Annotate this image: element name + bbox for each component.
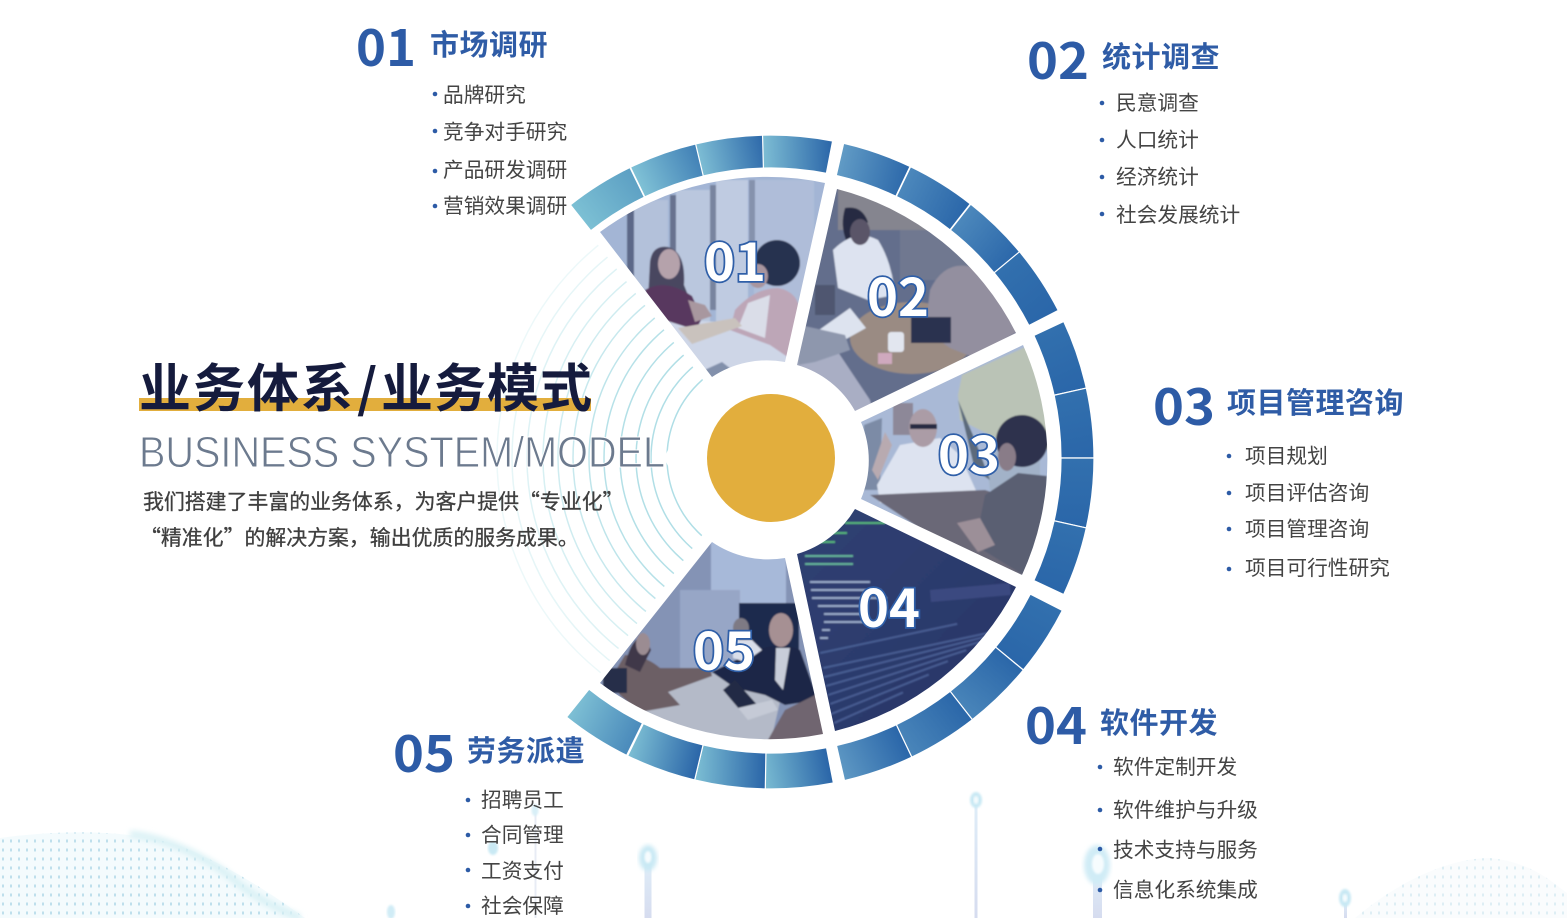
item block 01: market research: 市场调研 (430, 29, 548, 62)
item block 03: project management consulting: 项目管理咨询 (1227, 387, 1404, 420)
item block 02: statistical survey (1027, 22, 1240, 227)
item block 05: labour dispatch (393, 715, 585, 918)
background: left dotted wave (0, 832, 305, 918)
item block 03: project management consulting (1153, 368, 1404, 580)
item block 01: market research: 竞争对手研究 (443, 121, 567, 144)
item block 04: software development: 信息化系统集成 (1113, 879, 1258, 902)
intro paragraph (140, 486, 624, 552)
outer ring: segment group 01 (570, 128, 833, 236)
title with gold underline: / (357, 347, 377, 422)
item block 02: statistical survey: 人口统计 (1116, 129, 1199, 152)
item block 01: market research: 01 (356, 9, 416, 81)
photo number 01: 01 (704, 221, 766, 296)
item block 05: labour dispatch: 05 (393, 715, 455, 787)
intro paragraph: 我们搭建了丰富的业务体系，为客户提供“专业化” (143, 486, 624, 516)
photo number 05: 05 (693, 610, 755, 685)
item block 02: statistical survey: 统计调查 (1102, 41, 1220, 74)
item block 05: labour dispatch: 招聘员工 (481, 789, 564, 812)
item block 01: market research: 品牌研究 (443, 84, 526, 107)
photo wedge 02: team around round table (797, 189, 1016, 411)
photo number 04: 04 (858, 567, 920, 642)
concentric arcs (496, 245, 703, 673)
item block 02: statistical survey: 民意调查 (1116, 92, 1199, 115)
item block 02: statistical survey: 经济统计 (1116, 166, 1199, 189)
item block 04: software development (1025, 687, 1258, 902)
background: right dotted wave (1355, 858, 1567, 918)
item block 03: project management consulting: 项目管理咨询 (1245, 518, 1369, 541)
item block 03: project management consulting: 03 (1153, 368, 1215, 440)
photo wedge 03: man in white shirt and woman (861, 345, 1048, 575)
item block 01: market research (356, 9, 567, 218)
item block 04: software development: 技术支持与服务 (1113, 839, 1258, 862)
item block 05: labour dispatch: 劳务派遣 (467, 735, 585, 768)
photo wedge 04: code on a dark screen (797, 509, 1016, 731)
item block 05: labour dispatch: 合同管理 (481, 824, 564, 847)
outer ring: segment group 04 (829, 591, 1062, 788)
title with gold underline: 业务模式 (381, 347, 593, 422)
item block 03: project management consulting: 项目可行性研究 (1245, 557, 1390, 580)
photo wedge 05: handshake across table (600, 542, 823, 740)
item block 02: statistical survey: 02 (1027, 22, 1089, 94)
item block 03: project management consulting: 项目评估咨询 (1245, 482, 1369, 505)
item block 03: project management consulting: 项目规划 (1245, 445, 1328, 468)
outer ring: segment group 02 (835, 143, 1064, 331)
item block 04: software development: 软件开发 (1100, 707, 1218, 740)
intro paragraph: “精准化”的解决方案，输出优质的服务成果。 (140, 522, 579, 552)
item block 04: software development: 软件定制开发 (1113, 756, 1237, 779)
title with gold underline: 业务体系 (139, 347, 355, 422)
item block 05: labour dispatch: 工资支付 (481, 860, 564, 883)
title with gold underline (139, 347, 593, 422)
item block 01: market research: 营销效果调研 (443, 195, 567, 218)
photo number 03: 03 (938, 414, 1000, 489)
item block 05: labour dispatch: 社会保障 (481, 895, 564, 918)
outer ring: segment group 05 (563, 686, 833, 797)
english subtitle: BUSINESS SYSTEM/MODEL (139, 428, 665, 477)
item block 04: software development: 04 (1025, 687, 1087, 759)
central gold circle (707, 394, 835, 522)
photo number 02: 02 (867, 256, 929, 331)
photo wedge 01: meeting by windows (600, 176, 825, 377)
item block 01: market research: 产品研发调研 (443, 159, 567, 182)
item block 04: software development: 软件维护与升级 (1113, 799, 1258, 822)
background: glowing light beams (387, 792, 1351, 918)
item block 02: statistical survey: 社会发展统计 (1116, 204, 1240, 227)
outer ring: segment group 03 (1028, 321, 1101, 596)
